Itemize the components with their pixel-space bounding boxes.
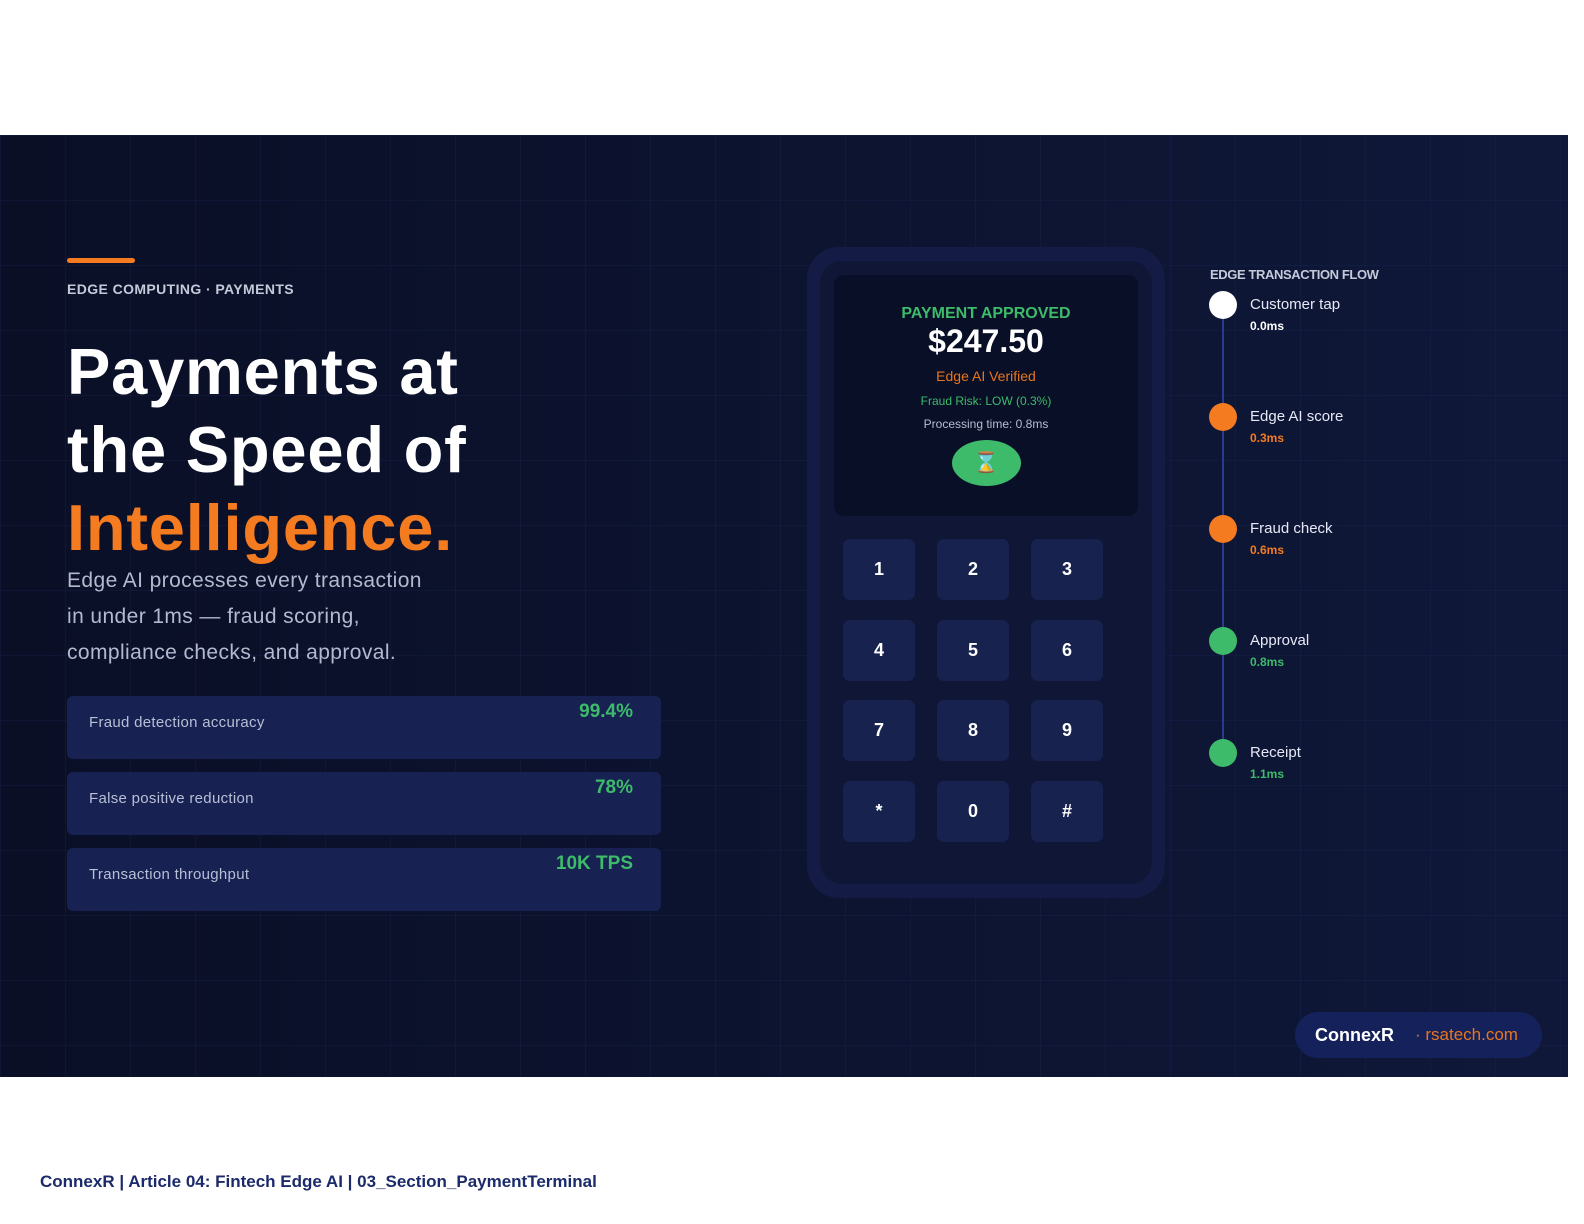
- accent bar: [67, 258, 135, 263]
- screen: $247.50: [928, 323, 1044, 359]
- background panel: [0, 135, 1568, 1077]
- step: approval: [1209, 627, 1309, 669]
- screen: PAYMENT APPROVED: [901, 305, 1071, 322]
- step: customer tap: [1209, 291, 1340, 333]
- step: fraud check: Fraud check: [1250, 520, 1333, 537]
- icon: approved badge: ⌛: [974, 452, 998, 474]
- brand pill: ConnexR: [1315, 1025, 1394, 1045]
- step: edge ai score: 0.3ms: [1250, 431, 1284, 445]
- step: fraud check: 0.6ms: [1250, 543, 1284, 557]
- keypad: 4: [874, 640, 884, 660]
- keypad: 2: [968, 559, 978, 579]
- stat: fraud detection: 99.4%: [579, 701, 633, 722]
- footer caption: ConnexR | Article 04: Fintech Edge AI | 03_Section_PaymentTerminal: [40, 1172, 597, 1191]
- keypad: 8: [968, 720, 978, 740]
- description: in under 1ms — fraud scoring,: [67, 605, 360, 628]
- step: receipt: Receipt: [1250, 744, 1301, 761]
- flow heading: EDGE TRANSACTION FLOW: [1210, 267, 1379, 282]
- brand pill: [1295, 1012, 1542, 1058]
- keypad: 5: [968, 640, 978, 660]
- step: approval: Approval: [1250, 632, 1309, 649]
- keypad: 3: [1062, 559, 1072, 579]
- stat: throughput: 10K TPS: [556, 853, 633, 874]
- step: customer tap: Customer tap: [1250, 296, 1340, 313]
- stat: fraud detection: [67, 696, 661, 759]
- keypad: 7: [874, 720, 884, 740]
- screen: Edge AI Verified: [936, 368, 1036, 384]
- keypad: 1: [874, 559, 884, 579]
- stat: false positive: 78%: [595, 777, 633, 798]
- brand pill: · rsatech.com: [1415, 1025, 1518, 1044]
- title: the Speed of: [67, 413, 467, 486]
- keypad: 0: [968, 801, 978, 821]
- icon: approved badge: [952, 440, 1020, 486]
- description: [67, 569, 422, 664]
- title: [67, 335, 467, 564]
- keypad: *: [875, 801, 882, 821]
- payment terminal: [807, 247, 1165, 898]
- description: compliance checks, and approval.: [67, 641, 396, 664]
- keypad: 6: [1062, 640, 1072, 660]
- stat: throughput: [67, 848, 661, 911]
- step: fraud check: [1209, 515, 1333, 557]
- keypad: [843, 539, 1103, 842]
- step: edge ai score: Edge AI score: [1250, 408, 1343, 425]
- description: Edge AI processes every transaction: [67, 569, 422, 592]
- screen: Fraud Risk: LOW (0.3%): [921, 394, 1051, 408]
- title: Intelligence.: [67, 491, 453, 564]
- stat: fraud detection: Fraud detection accuracy: [89, 714, 265, 731]
- keypad: 9: [1062, 720, 1072, 740]
- title: Payments at: [67, 335, 459, 408]
- step: receipt: [1209, 739, 1301, 781]
- stat: false positive: False positive reduction: [89, 790, 254, 807]
- stat: throughput: Transaction throughput: [89, 866, 249, 883]
- eyebrow label: EDGE COMPUTING · PAYMENTS: [67, 281, 294, 297]
- step: receipt: 1.1ms: [1250, 767, 1284, 781]
- timeline: [1222, 318, 1224, 740]
- screen: Processing time: 0.8ms: [924, 417, 1048, 431]
- step: edge ai score: [1209, 403, 1343, 445]
- screen: [834, 275, 1138, 516]
- keypad: #: [1062, 801, 1072, 821]
- step: customer tap: 0.0ms: [1250, 319, 1284, 333]
- step: approval: 0.8ms: [1250, 655, 1284, 669]
- stat: false positive: [67, 772, 661, 835]
